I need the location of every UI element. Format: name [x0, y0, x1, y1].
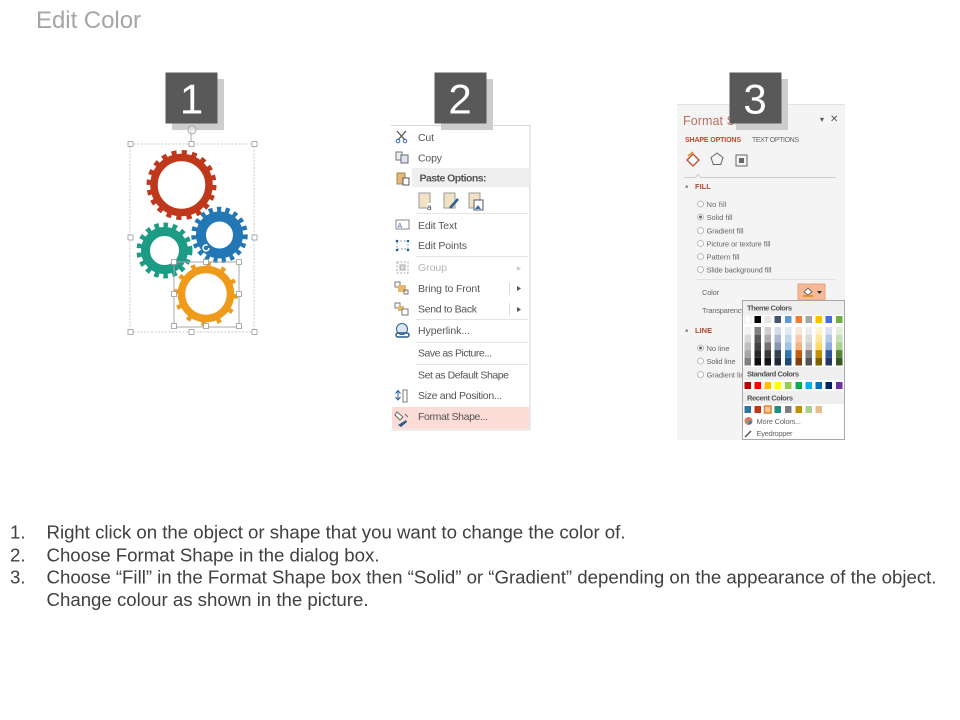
instructions list: 2. — [10, 544, 26, 566]
standard color swatches — [744, 382, 842, 389]
menu icons: a — [427, 203, 432, 212]
panel: step 1 gears selection — [128, 126, 257, 334]
color picker dropdown — [742, 300, 844, 440]
panel: step 3 format shape pane — [677, 104, 845, 440]
fill section: Transparency — [702, 306, 745, 315]
more colors: More Colors... — [756, 417, 801, 426]
fill section: Pattern fill — [706, 252, 740, 262]
menu labels: Copy — [418, 152, 443, 164]
pane icons — [684, 152, 836, 178]
icon: orange gear — [176, 264, 236, 324]
menu labels: Bring to Front — [418, 283, 480, 295]
line section — [685, 326, 748, 380]
menu labels: Group — [418, 262, 447, 274]
number badge 2: 2 — [448, 76, 472, 122]
line section: Solid line — [706, 357, 736, 366]
panel: step 2 context menu — [391, 125, 530, 430]
instructions list — [10, 522, 936, 610]
fill section: No fill — [706, 200, 727, 209]
fill section: Color — [702, 288, 720, 297]
color picker dropdown: Standard Colors — [747, 370, 799, 378]
instructions list: 3. — [10, 566, 26, 588]
icon: red gear — [149, 152, 214, 218]
menu labels: Format Shape... — [418, 411, 488, 423]
menu icons — [395, 131, 521, 427]
menu labels: Edit Text — [418, 220, 457, 232]
selection frame: orange gear — [172, 245, 242, 328]
fill section: Gradient fill — [706, 226, 744, 236]
menu labels: Cut — [418, 132, 434, 144]
line section: Gradient line — [706, 370, 748, 380]
color picker dropdown: Theme Colors — [747, 304, 792, 312]
theme color swatches — [744, 316, 842, 366]
line section: No line — [706, 344, 730, 353]
menu labels: Set as Default Shape — [418, 370, 509, 382]
menu labels: Save as Picture... — [418, 348, 492, 360]
instructions list: 1. — [10, 522, 26, 542]
fill section: FILL — [695, 182, 711, 191]
number badge 1 — [166, 72, 224, 130]
fill section: Solid fill — [706, 213, 733, 222]
pane tabs: TEXT OPTIONS — [752, 137, 799, 144]
instructions list: Choose Format Shape in the dialog box. — [46, 544, 380, 566]
menu labels: Edit Points — [418, 240, 467, 252]
menu labels: Send to Back — [418, 304, 478, 316]
instructions list: Choose “Fill” in the Format Shape box then “Solid” or “Gradient” depending on the appearance of the object. — [46, 566, 936, 588]
panel: step 3 format shape pane: ▾ — [820, 115, 824, 124]
number badge 3 — [730, 72, 788, 130]
fill section — [685, 182, 836, 315]
color picker dropdown: Recent Colors — [747, 394, 793, 402]
selection frame: gear group — [128, 126, 257, 334]
fill section: Picture or texture fill — [706, 240, 771, 248]
instructions list: Change colour as shown in the picture. — [46, 589, 368, 610]
fill section: Slide background fill — [706, 266, 772, 274]
number badge 2 — [434, 72, 493, 130]
pane tabs — [685, 137, 799, 144]
icon: blue gear — [194, 210, 245, 260]
menu icons: A — [398, 223, 402, 230]
recent color swatches — [744, 406, 822, 413]
icon: green gear — [140, 226, 190, 276]
instructions list: Right click on the object or shape that you want to change the color of. — [46, 522, 626, 542]
pane header: Format Shape — [683, 114, 763, 128]
title: Edit Color — [36, 7, 141, 34]
menu labels: Hyperlink... — [418, 325, 470, 337]
line section: LINE — [695, 326, 712, 335]
menu labels: Size and Position... — [418, 390, 502, 402]
number badge 1: 1 — [180, 76, 203, 122]
panel: step 3 format shape pane: ✕ — [830, 114, 838, 125]
menu labels — [418, 132, 509, 423]
menu labels: Paste Options: — [420, 172, 486, 184]
pane tabs: SHAPE OPTIONS — [685, 137, 741, 144]
number badge 3: 3 — [743, 76, 767, 122]
eyedropper: Eyedropper — [756, 429, 793, 438]
